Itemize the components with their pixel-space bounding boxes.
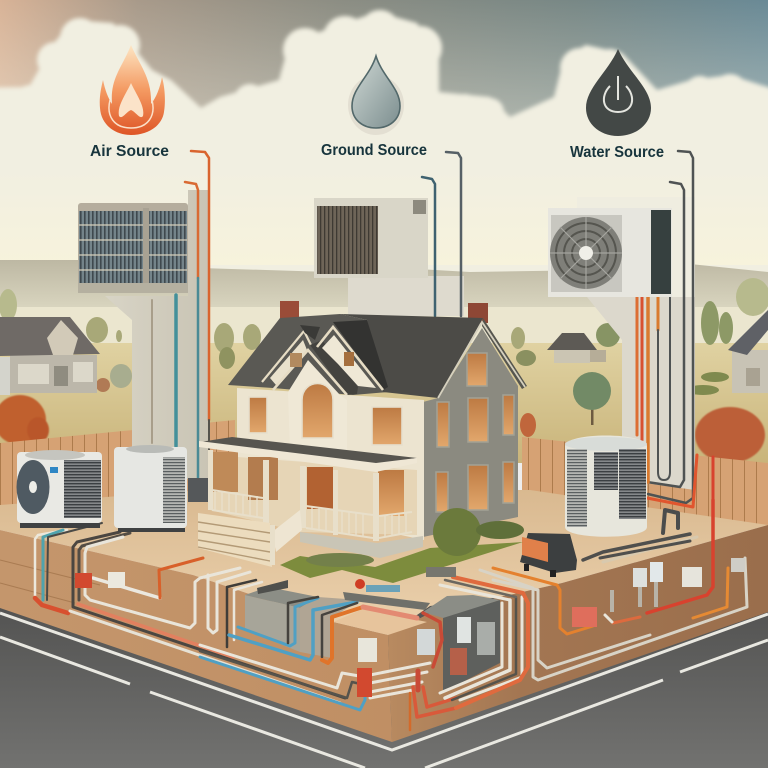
background: hills — [0, 260, 768, 345]
icon: air source flame — [100, 45, 165, 135]
tree: right small — [573, 372, 611, 425]
background: sky — [0, 0, 768, 300]
distant house: right — [728, 310, 768, 393]
house: porch roof — [200, 437, 417, 464]
house: porch posts — [208, 450, 379, 541]
unit: water source outdoor unit — [548, 208, 672, 297]
platform: right wooden face — [388, 525, 768, 742]
underground pipes: centre group — [200, 597, 417, 710]
base slats under left pillar — [188, 478, 208, 502]
red clamp on left wall — [75, 573, 92, 588]
portable orange unit — [520, 533, 577, 577]
house — [198, 301, 527, 567]
underground pipes: left group — [35, 523, 345, 703]
tree: behind grey wall — [520, 413, 536, 437]
underground pipes: corner group — [370, 577, 528, 730]
house: main roof — [228, 314, 527, 398]
house: porch fascia — [199, 441, 417, 472]
background: lower sky — [0, 170, 768, 265]
background: clouds — [0, 10, 768, 320]
fence: right — [522, 437, 768, 527]
right pillar — [577, 197, 695, 490]
box on lawn — [426, 567, 456, 577]
house: cream front wall — [237, 388, 424, 540]
tree: right autumn — [695, 407, 765, 463]
centre pipes — [422, 152, 461, 316]
house: front steps — [198, 510, 302, 567]
house: door and porch windows — [212, 452, 404, 516]
tree: left autumn — [0, 395, 49, 445]
unit: ground source outdoor unit — [314, 198, 428, 278]
left pillar — [105, 190, 210, 485]
shrubs — [306, 508, 524, 567]
icon: ground source water drop — [348, 56, 404, 135]
unit: air source outdoor unit — [78, 203, 188, 293]
platform: top surface — [0, 490, 768, 635]
right pipes — [637, 151, 713, 540]
platform: corner top slab — [333, 609, 427, 635]
house: windows — [249, 384, 402, 445]
label: air source: Air Source — [90, 143, 169, 160]
house: chimneys — [280, 301, 488, 323]
house: porch interior — [210, 455, 417, 535]
distant house: left — [0, 317, 100, 395]
lawn — [280, 542, 523, 583]
underground pipes: right group — [480, 500, 747, 680]
valve assembly on top of the corner — [343, 579, 430, 610]
left pipes: orange and teal — [152, 151, 209, 480]
control boxes on the wall — [108, 558, 745, 675]
hose on platform — [583, 510, 697, 562]
condenser unit: lower left, second — [114, 445, 187, 532]
house: foundation — [300, 532, 423, 558]
background: distant trees — [0, 278, 768, 395]
distant house: centre — [547, 333, 606, 363]
condenser unit: right round — [565, 436, 647, 537]
platform: concrete block — [245, 580, 360, 658]
road markings — [0, 613, 768, 768]
label: ground source: Ground Source — [321, 142, 427, 159]
road — [0, 595, 768, 768]
platform: left wooden face — [0, 530, 392, 742]
red pipe clamp — [357, 668, 372, 697]
fence: left — [0, 420, 235, 508]
platform: dark service panel — [423, 595, 500, 692]
house: right gable trim — [438, 322, 525, 398]
house: grey side wall — [423, 328, 518, 537]
house: porch railings — [212, 490, 412, 538]
background: fields — [0, 343, 768, 463]
centre pillar — [348, 276, 464, 316]
label: water source: Water Source — [570, 144, 664, 161]
icon: water source dark drop — [586, 49, 651, 136]
condenser unit: lower left, with fan — [16, 450, 102, 528]
house: front gables — [262, 320, 388, 460]
